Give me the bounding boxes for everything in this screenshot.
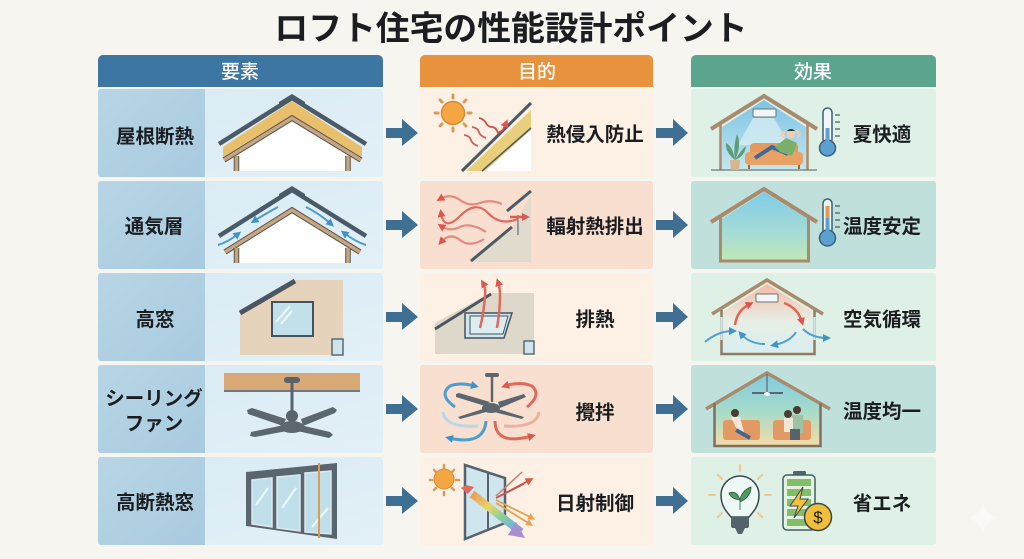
panel: 目的 column [420,55,653,545]
row: 攪拌 [420,365,653,453]
heading: 効果: 効果 [794,61,832,83]
icon: fan stirring air [443,373,539,440]
row: 屋根断熱: 屋根断熱 [116,126,194,148]
icon: ceiling fan [224,373,360,438]
heading: 要素: 要素 [221,61,259,83]
icon: high-insulation window [246,463,337,539]
arrows: 目的 to 効果 [656,119,688,514]
row: 空気循環: 空気循環 [843,309,921,331]
heading: 目的 [420,55,653,87]
icon: high window [240,280,343,355]
row: 攪拌: 攪拌 [575,402,615,424]
row: 省エネ: 省エネ [853,493,911,515]
row: 温度安定: 温度安定 [843,216,921,238]
sofa [745,143,803,169]
icon: sun, window and filtered rays [430,465,532,539]
icon: battery and coin [783,471,832,530]
row: 排熱: 排熱 [575,309,615,331]
heading: 目的: 目的 [518,61,556,83]
row: 日射制御 [420,457,653,545]
row: 熱侵入防止: 熱侵入防止 [546,124,644,146]
row: 夏快適 [691,89,936,177]
row: 高断熱窓 [98,457,383,545]
arrows: 要素 to 目的 [386,119,418,514]
row: 通気層 [98,181,383,269]
panel: 要素 column [98,55,383,545]
heading: 要素 [98,55,383,87]
row: 排熱 [420,273,653,361]
row: 温度安定 [691,181,936,269]
row: 日射制御: 日射制御 [556,493,634,515]
icon: family under ceiling fan [706,373,830,446]
row: シーリングファン: ファン [125,413,183,435]
thermometer [820,108,840,156]
icon: heat exhaust window [435,282,534,354]
row: シーリングファン: シーリング [105,387,203,410]
heading: 効果 [691,55,936,87]
row: シーリングファン [98,365,383,453]
decorative sparkle [968,502,998,534]
icon: battery and coin: $ [813,508,823,527]
person [755,129,800,158]
icon: light bulb with leaves [709,465,771,534]
icon: stable house with thermometer [711,189,840,261]
panel: 効果 column [691,55,936,545]
icon: cool house with resting person [711,96,840,170]
row: 輻射熱排出 [420,181,653,269]
row: 高窓: 高窓 [135,308,175,331]
row: 通気層: 通気層 [125,216,183,238]
row: 輻射熱排出: 輻射熱排出 [546,216,644,238]
icon: sun and reflected heat [435,95,531,171]
icon: radiant heat exhaust [440,191,531,262]
icon: ventilated roof [218,186,366,263]
row: 夏快適: 夏快適 [853,124,911,146]
row: 空気循環 [691,273,936,361]
row: 高断熱窓: 高断熱窓 [116,491,194,514]
row: 温度均一: 温度均一 [843,401,921,423]
row: 省エネ [691,457,936,545]
row: 温度均一 [691,365,936,453]
icon: insulated roof [219,94,366,171]
row: 屋根断熱 [98,89,383,177]
plant [726,134,746,170]
row: 熱侵入防止 [420,89,653,177]
icon: air circulation house [705,280,827,354]
title: ロフト住宅の性能設計ポイント [274,10,748,48]
row: 高窓 [98,273,383,361]
